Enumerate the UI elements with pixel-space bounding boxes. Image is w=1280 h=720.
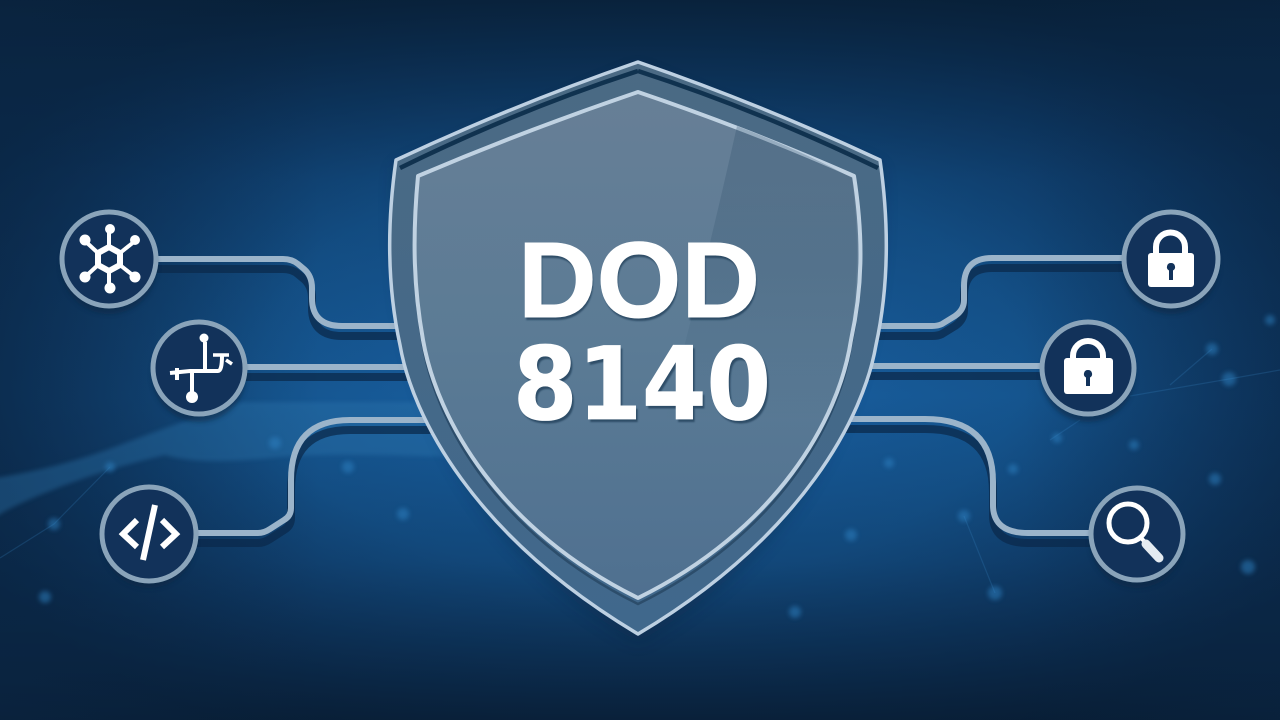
shield inner face — [415, 92, 860, 598]
connector 1 left — [155, 259, 410, 326]
icon: branching network — [152, 322, 246, 422]
connector lines: left — [155, 259, 440, 543]
icon: code brackets — [102, 487, 196, 588]
network dots — [39, 315, 1275, 618]
connector 3 left — [195, 420, 440, 533]
shield drop shadow — [395, 70, 881, 642]
rim dark groove — [400, 71, 878, 168]
connector 1 right — [865, 258, 1125, 326]
shield — [390, 62, 886, 642]
icon: padlock top right — [1123, 212, 1219, 314]
icon: magnifier — [1090, 488, 1184, 588]
title line 1: DOD — [518, 219, 760, 340]
connector shadows right — [835, 268, 1125, 543]
icon: network hub — [61, 212, 157, 314]
glass highlight — [665, 126, 857, 420]
connector 3 right — [835, 419, 1090, 533]
title shadow: DOD — [519, 222, 761, 343]
title text — [513, 219, 773, 446]
connector 2 right — [855, 363, 1042, 369]
connector shadows left — [155, 269, 440, 543]
icon: padlock middle right — [1041, 322, 1135, 422]
title line 2: 8140 — [513, 325, 771, 443]
title shadow: 8140 — [515, 328, 773, 446]
inner face shadow line — [415, 98, 860, 604]
connector lines: right — [835, 258, 1125, 543]
connector 2 left — [245, 364, 420, 370]
title shadow — [515, 222, 773, 446]
shield outer rim — [390, 62, 886, 634]
network lines — [0, 349, 1280, 593]
